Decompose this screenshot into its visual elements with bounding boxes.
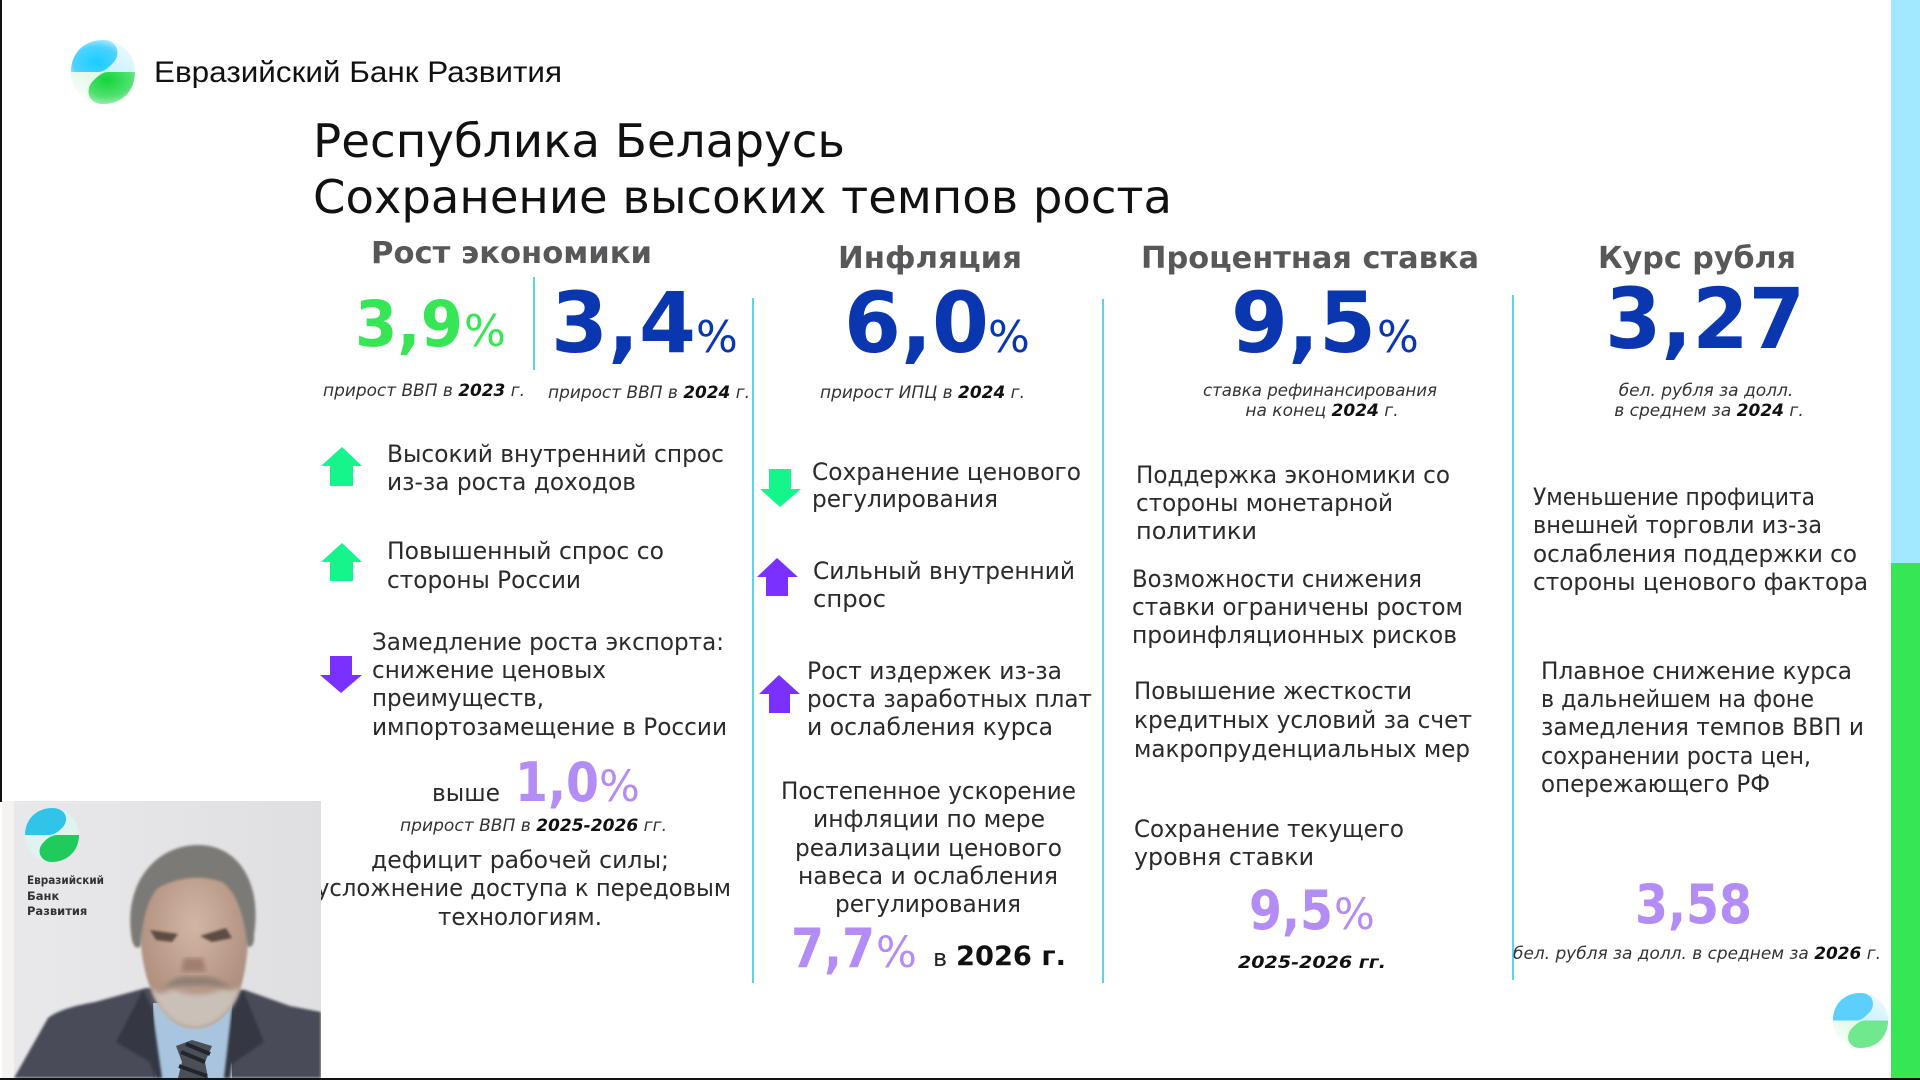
text: gradual acceleration: реализации ценового <box>795 834 1062 862</box>
text: rate cut limits <box>1132 565 1463 649</box>
logo: bank emblem <box>71 40 135 104</box>
text: rate cut limits: ставки ограничены ростом <box>1132 593 1463 621</box>
metric: GDP growth 2023 <box>323 288 525 401</box>
forecast: rate 9.5%: 9,5 <box>1249 879 1333 942</box>
video: wall logo text: Банк <box>27 889 59 903</box>
text: gradual acceleration: Постепенное ускорение <box>781 777 1076 805</box>
text: tighter credit conditions: макропруденциальных мер <box>1134 735 1470 763</box>
text: surplus reduction: внешней торговли из-за <box>1533 511 1822 539</box>
metric: inflation 6.0%: 6,0 <box>844 274 989 372</box>
metric: GDP growth 2023: прирост ВВП в 2023 г. <box>323 381 525 401</box>
video: wall logo <box>25 808 79 862</box>
text: rate held <box>1134 815 1404 871</box>
text: constraints: дефицит рабочей силы; <box>371 846 669 874</box>
video: wall logo text <box>28 875 104 915</box>
text: surplus reduction <box>1533 483 1868 596</box>
column dividers <box>533 277 1514 983</box>
metric: GDP growth 2024 <box>548 274 750 403</box>
text: gradual decline <box>1541 657 1864 798</box>
metric: inflation 6.0%: прирост ИПЦ в 2024 г. <box>820 383 1025 403</box>
factor: price regulation <box>760 458 1081 513</box>
factor: rising costs <box>759 657 1092 741</box>
text: monetary support: Поддержка экономики со <box>1136 461 1450 489</box>
factor: demand from Russia <box>321 537 664 594</box>
factor: export slowdown: Замедление роста экспорта: <box>372 628 724 656</box>
factor: price regulation: Сохранение ценового <box>812 458 1081 486</box>
metric: rate 9.5%: ставка рефинансирования <box>1203 381 1437 401</box>
icon: purple up arrow <box>757 558 798 596</box>
text: rate held: уровня ставки <box>1134 843 1314 871</box>
metric: GDP growth 2024: % <box>696 312 738 363</box>
forecast: inflation 7.7% in 2026: 7,7 <box>791 917 875 980</box>
panel: ruble exchange rate <box>1513 241 1881 964</box>
forecast: inflation 7.7% in 2026: % <box>876 928 917 978</box>
forecast: rate 3.58: бел. рубля за долл. в среднем за 2026 г. <box>1513 944 1881 964</box>
metric: inflation 6.0% <box>820 274 1030 403</box>
text: gradual decline: Плавное снижение курса <box>1541 657 1852 685</box>
forecast: inflation 7.7% in 2026 <box>791 917 1066 980</box>
title <box>313 114 1172 224</box>
factor: export slowdown: снижение ценовых <box>372 656 606 684</box>
text: gradual acceleration <box>781 777 1076 918</box>
metric: rate 9.5% <box>1203 274 1437 421</box>
text: gradual decline: опережающего РФ <box>1541 770 1770 798</box>
panel: inflation <box>757 241 1092 980</box>
text: constraints: усложнение доступа к передовым <box>316 874 731 902</box>
text: gradual acceleration: навеса и ослабления <box>798 862 1058 890</box>
factor: rising costs: и ослабления курса <box>807 713 1053 741</box>
factor: demand from Russia: стороны России <box>387 566 581 594</box>
heading: economic growth: Рост экономики <box>371 236 652 271</box>
forecast: rate 9.5%: 2025-2026 гг. <box>1238 953 1386 973</box>
metric: rate 9.5%: 9,5 <box>1231 274 1376 372</box>
logo: small emblem bottom right <box>1833 993 1888 1048</box>
title: Республика Беларусь <box>313 114 845 168</box>
factor: export slowdown: импортозамещение в России <box>372 713 727 741</box>
text: monetary support <box>1136 461 1450 545</box>
factor: domestic demand <box>321 440 724 496</box>
text: surplus reduction: стороны ценового фактора <box>1533 568 1868 596</box>
icon: purple up arrow <box>759 675 800 713</box>
forecast: GDP above 1.0%: % <box>599 762 640 812</box>
metric: rate 9.5%: на конец 2024 г. <box>1245 401 1399 421</box>
text: monetary support: политики <box>1136 517 1257 545</box>
text: rate cut limits: проинфляционных рисков <box>1132 621 1457 649</box>
forecast: rate 3.58: 3,58 <box>1635 873 1752 936</box>
text: rate cut limits: Возможности снижения <box>1132 565 1422 593</box>
video: speaker <box>2 801 321 1078</box>
heading: inflation: Инфляция <box>838 241 1022 276</box>
text: gradual acceleration: регулирования <box>835 890 1021 918</box>
factor: strong domestic demand <box>757 557 1075 613</box>
forecast: inflation 7.7% in 2026: 2026 г. <box>956 941 1066 972</box>
panel: economic growth <box>316 236 750 931</box>
factor: strong domestic demand: спрос <box>813 585 886 613</box>
text: constraints: технологиям. <box>438 903 602 931</box>
video: wall logo text: Евразийский <box>27 873 104 887</box>
forecast: GDP above 1.0%: выше <box>432 779 500 807</box>
logo: bank name: Евразийский Банк Развития <box>154 56 562 89</box>
factor: export slowdown <box>320 628 727 741</box>
metric: inflation 6.0%: % <box>988 312 1030 363</box>
text: surplus reduction: ослабления поддержки со <box>1533 540 1857 568</box>
right colour strip <box>1891 0 1920 1078</box>
icon: green up arrow <box>321 447 362 486</box>
forecast: rate 9.5% <box>1238 879 1386 973</box>
metric: rate 3.27 <box>1605 270 1805 421</box>
title: Сохранение высоких темпов роста <box>313 170 1172 224</box>
metric: GDP growth 2023: % <box>464 306 506 357</box>
factor: strong domestic demand: Сильный внутренний <box>813 557 1075 585</box>
factor: export slowdown: преимуществ, <box>372 684 544 712</box>
text: gradual acceleration: инфляции по мере <box>813 805 1045 833</box>
forecast: GDP above 1.0% <box>400 751 667 836</box>
video: person <box>14 845 321 1078</box>
text: surplus reduction: Уменьшение профицита <box>1533 483 1815 511</box>
text: gradual decline: замедления темпов ВВП и <box>1541 713 1864 741</box>
factor: demand from Russia: Повышенный спрос со <box>387 537 664 565</box>
text: rate held: Сохранение текущего <box>1134 815 1404 843</box>
icon: green down arrow <box>760 469 801 507</box>
text: tighter credit conditions: Повышение жесткости <box>1134 677 1412 705</box>
heading: interest rate: Процентная ставка <box>1141 241 1479 276</box>
icon: green up arrow <box>321 543 362 581</box>
text: tighter credit conditions <box>1134 677 1472 763</box>
text: constraints <box>316 846 731 931</box>
metric: rate 3.27: бел. рубля за долл. <box>1619 381 1793 401</box>
video: wall logo text: Развития <box>27 904 87 918</box>
text: tighter credit conditions: кредитных условий за счет <box>1134 706 1472 734</box>
factor: price regulation: регулирования <box>812 485 998 513</box>
metric: GDP growth 2023: 3,9 <box>355 288 463 361</box>
heading: ruble rate: Курс рубля <box>1598 241 1796 276</box>
metric: rate 3.27: в среднем за 2024 г. <box>1614 401 1804 421</box>
factor: domestic demand: из-за роста доходов <box>387 468 636 496</box>
forecast: rate 3.58 <box>1513 873 1881 964</box>
factor: rising costs: Рост издержек из-за <box>807 657 1062 685</box>
metric: GDP growth 2024: 3,4 <box>551 274 696 372</box>
panel: interest rate <box>1132 241 1479 973</box>
text: gradual decline: сохранении роста цен, <box>1541 742 1811 770</box>
forecast: GDP above 1.0%: 1,0 <box>515 751 599 814</box>
icon: purple down arrow <box>320 656 362 693</box>
text: monetary support: стороны монетарной <box>1136 489 1393 517</box>
factor: rising costs: роста заработных плат <box>807 685 1092 713</box>
factor: domestic demand: Высокий внутренний спрос <box>387 440 724 468</box>
metric: rate 9.5%: % <box>1377 312 1419 363</box>
forecast: rate 9.5%: % <box>1334 890 1375 940</box>
forecast: inflation 7.7% in 2026: в <box>933 944 947 972</box>
metric: GDP growth 2024: прирост ВВП в 2024 г. <box>548 383 750 403</box>
metric: rate 3.27: 3,27 <box>1605 270 1805 368</box>
forecast: GDP above 1.0%: прирост ВВП в 2025-2026 гг. <box>400 816 667 836</box>
text: gradual decline: в дальнейшем на фоне <box>1541 685 1814 713</box>
